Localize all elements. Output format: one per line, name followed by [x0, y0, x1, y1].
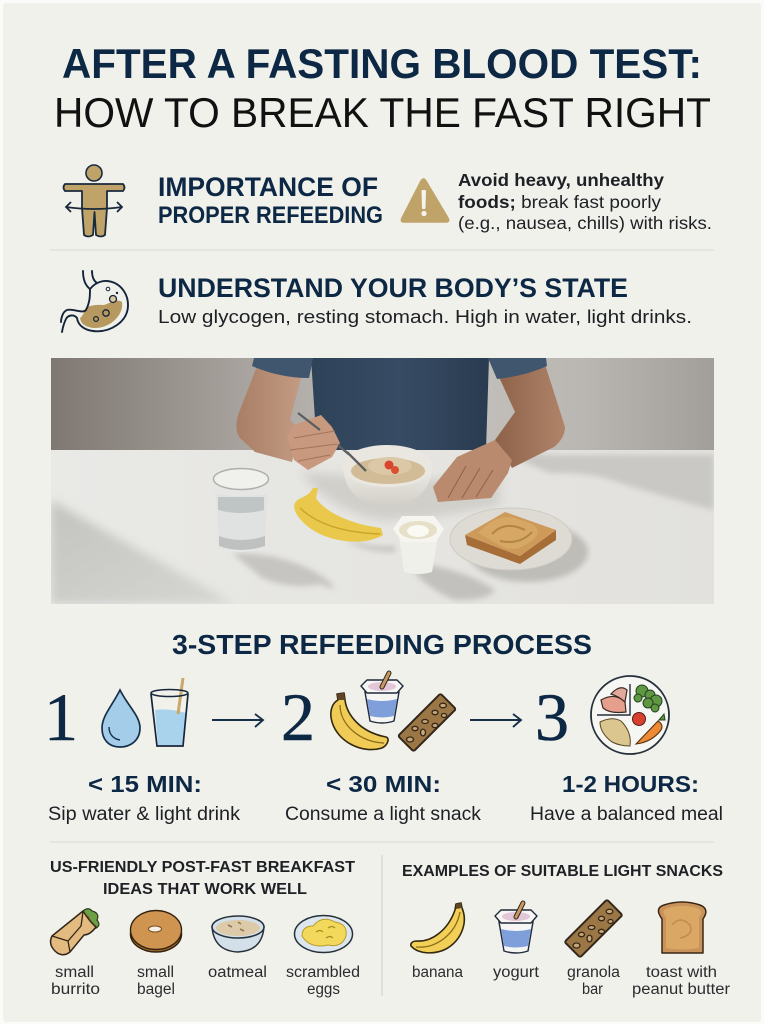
title: [54, 40, 711, 136]
icon: banana: [331, 693, 388, 750]
glass: [236, 550, 249, 552]
icon: glass with straw: [151, 678, 188, 746]
banana label: banana: [412, 964, 463, 981]
warning text: [458, 170, 712, 233]
toast with peanut butter label: toast with: [646, 964, 717, 981]
warning text: Avoid heavy, unhealthy: [458, 170, 664, 190]
oatmeal label: oatmeal: [208, 964, 267, 981]
scrambled eggs label: eggs: [307, 981, 340, 998]
shirt: [311, 358, 489, 450]
step 2 label: [285, 771, 481, 825]
step 2 number: 2: [281, 679, 315, 755]
bowl: [344, 472, 430, 496]
step 2 label: Consume a light snack: [285, 804, 481, 825]
title: AFTER A FASTING BLOOD TEST:: [62, 40, 702, 87]
body state description: Low glycogen, resting stomach. High in water, light drinks.: [158, 306, 692, 327]
step 1 number: 1: [44, 679, 78, 755]
small bagel label: bagel: [137, 981, 175, 998]
granola bar label: granola: [567, 964, 620, 981]
heading: importance of proper refeeding: [158, 172, 383, 229]
photo: person with food on a table: [51, 358, 714, 604]
step 3 number: 3: [535, 679, 569, 755]
step 1 label: Sip water & light drink: [48, 804, 241, 825]
small bagel label: [137, 964, 175, 998]
glass shadow: [232, 553, 334, 588]
scrambled eggs label: [286, 964, 360, 998]
icon: bagel: [130, 910, 182, 952]
small burrito label: small: [55, 964, 94, 981]
left arm: [236, 361, 301, 462]
granola bar label: [567, 964, 620, 998]
small burrito label: [51, 964, 100, 998]
toast with peanut butter label: peanut butter: [632, 981, 730, 998]
panel: light snack examples: [402, 863, 730, 998]
small burrito label: burrito: [51, 981, 100, 998]
icon: balanced meal plate: [591, 676, 669, 754]
step 2 label: < 30 MIN:: [326, 771, 441, 797]
small bagel label: small: [137, 964, 174, 981]
yogurt label: yogurt: [493, 964, 540, 981]
left hand: [287, 415, 340, 470]
title: HOW TO BREAK THE FAST RIGHT: [54, 89, 711, 136]
icon: granola bar: [398, 694, 456, 751]
breakfast heading: IDEAS THAT WORK WELL: [103, 881, 307, 898]
icon: body with arrows: [64, 165, 124, 236]
panel: breakfast ideas: [50, 859, 360, 998]
heading: importance of proper refeeding: PROPER REFEEDING: [158, 202, 383, 229]
plate with toast: [468, 522, 588, 582]
heading: importance of proper refeeding: IMPORTANCE OF: [158, 172, 378, 202]
warning text: foods; break fast poorly: [458, 192, 661, 212]
granola bar label: bar: [582, 981, 603, 998]
step 1 label: [48, 771, 241, 825]
breakfast heading: US-FRIENDLY POST-FAST BREAKFAST: [50, 859, 356, 876]
icon: burrito: [51, 909, 99, 955]
step 3 label: Have a balanced meal: [530, 804, 723, 825]
right hand: [433, 440, 512, 502]
icon: water drop: [102, 690, 140, 747]
icon: oatmeal bowl: [212, 916, 264, 952]
step 3 label: 1-2 HOURS:: [562, 771, 699, 797]
toast with peanut butter label: [632, 964, 730, 998]
breakfast heading: [50, 859, 356, 898]
icon: toast with peanut butter: [658, 902, 706, 953]
icon: scrambled eggs: [294, 916, 352, 952]
icon: warning triangle: [401, 179, 449, 222]
icon: yogurt cup: [361, 673, 403, 723]
right arm: [495, 361, 565, 468]
icon: banana: [411, 903, 464, 953]
arrow 2 to 3: [470, 714, 521, 727]
heading: 3-step refeeding process: 3-STEP REFEEDING PROCESS: [172, 629, 592, 660]
icon: granola bar: [565, 900, 622, 957]
warning text: (e.g., nausea, chills) with risks.: [458, 213, 712, 233]
sleeves: [252, 358, 313, 378]
icon: stomach: [61, 271, 128, 332]
heading: understand your body's state: UNDERSTAND YOUR BODY’S STATE: [158, 273, 628, 303]
icon: yogurt: [495, 903, 537, 953]
step 1 label: < 15 MIN:: [88, 771, 202, 797]
step 3 label: [530, 771, 723, 825]
snacks heading: EXAMPLES OF SUITABLE LIGHT SNACKS: [402, 863, 723, 880]
banana: [350, 542, 396, 554]
yogurt: [414, 563, 495, 600]
arrow 1 to 2: [212, 714, 263, 727]
scrambled eggs label: scrambled: [286, 964, 360, 981]
